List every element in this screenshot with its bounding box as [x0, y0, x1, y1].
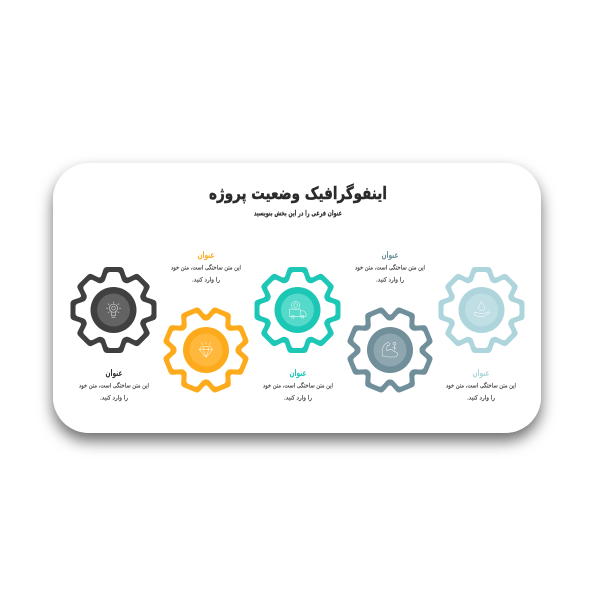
body text: را وارد کنید.	[192, 276, 220, 284]
step 4: slate gear	[337, 251, 443, 403]
gear: dark	[73, 270, 154, 350]
icon: delivery truck	[289, 301, 306, 318]
step 1: dark gear	[73, 270, 154, 402]
gear: yellow	[153, 297, 259, 403]
icon: hand with drop	[474, 302, 489, 316]
body text	[79, 382, 149, 402]
body text: این متن ساختگی است، متن خود	[446, 382, 516, 390]
icon: light bulb	[106, 302, 121, 317]
body text: را وارد کنید.	[376, 276, 404, 284]
step 5: light blue gear	[441, 270, 522, 402]
step 2: yellow gear	[153, 251, 259, 403]
body text	[171, 264, 241, 284]
body text	[263, 382, 333, 402]
panel: card	[53, 163, 541, 433]
body text: را وارد کنید.	[284, 394, 312, 402]
body text: را وارد کنید.	[467, 394, 495, 402]
step 3: teal gear	[257, 270, 338, 402]
body text: این متن ساختگی است، متن خود	[263, 382, 333, 390]
gear: teal	[257, 270, 338, 350]
subtitle: عنوان فرعی را در این بخش بنویسید	[254, 208, 342, 218]
body text: را وارد کنید.	[100, 394, 128, 402]
body text: این متن ساختگی است، متن خود	[171, 264, 241, 272]
body text	[355, 264, 425, 284]
gear: slate	[337, 297, 443, 403]
icon: diamond	[199, 342, 213, 357]
body text: این متن ساختگی است، متن خود	[79, 382, 149, 390]
gear: light blue	[441, 270, 522, 350]
body text	[446, 382, 516, 402]
heading: عنوان	[198, 251, 214, 261]
body text: این متن ساختگی است، متن خود	[355, 264, 425, 272]
heading: عنوان	[290, 369, 306, 379]
title: اینفوگرافیک وضعیت پروژه	[209, 183, 387, 204]
heading: عنوان	[382, 251, 398, 261]
icon: flexed arm	[382, 342, 398, 357]
heading: عنوان	[106, 369, 122, 379]
heading: عنوان	[472, 369, 490, 379]
